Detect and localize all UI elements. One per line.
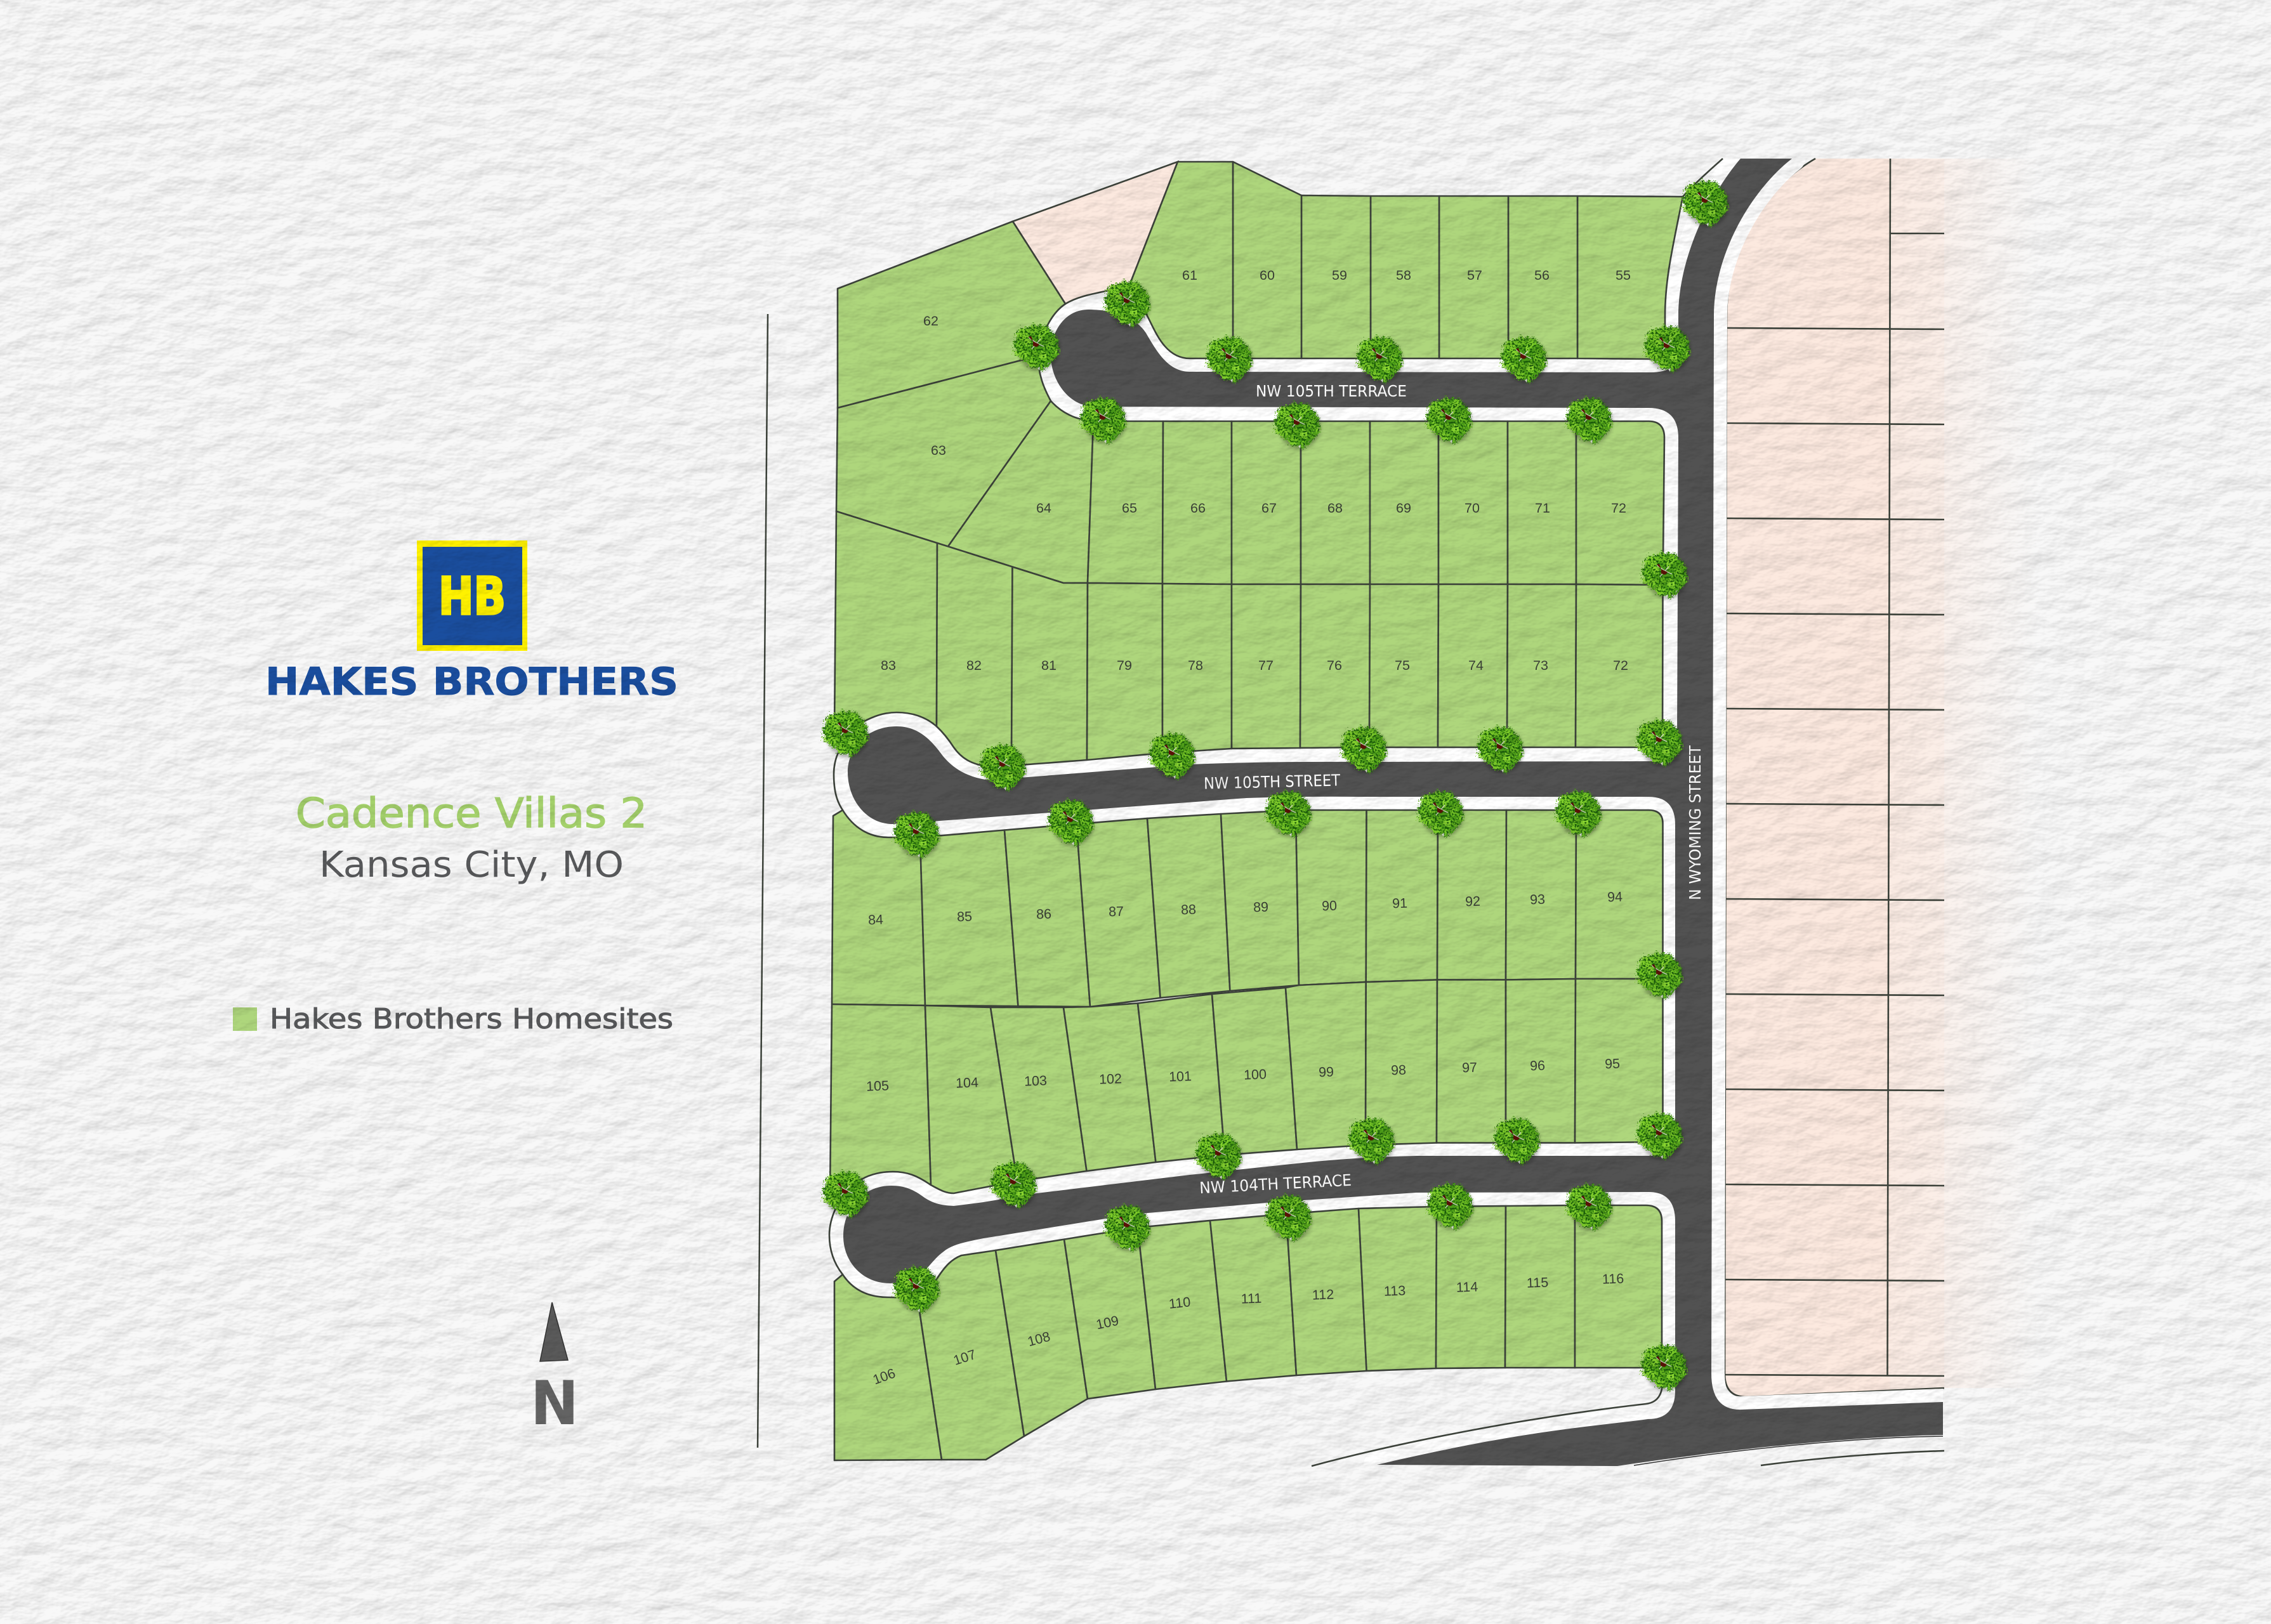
lot 70: 70 <box>1465 501 1480 516</box>
lot 100 <box>1212 988 1297 1155</box>
divider line between legend and site plan <box>758 314 768 1448</box>
lot 95 <box>1575 979 1662 1143</box>
icon: tree <box>1424 396 1472 444</box>
lot 103: 103 <box>1024 1073 1047 1089</box>
lot 66: 66 <box>1190 501 1206 516</box>
lot 104 <box>925 1005 1017 1193</box>
icon: tree <box>1635 951 1683 999</box>
lot 111: 111 <box>1241 1290 1262 1307</box>
community name: Cadence Villas 2 <box>296 790 647 837</box>
lot 74 <box>1438 584 1508 747</box>
lot 55: 55 <box>1616 268 1631 283</box>
icon: tree <box>892 1265 940 1313</box>
sidewalk edge lines <box>829 159 1944 1466</box>
lot 57: 57 <box>1467 268 1482 283</box>
lot 60 <box>1233 162 1301 358</box>
lot 110 <box>1138 1221 1227 1389</box>
icon: tree <box>1102 279 1150 327</box>
icon: tree <box>1102 1203 1150 1252</box>
panel: street trees <box>820 179 1728 1391</box>
lot 63: 63 <box>931 443 946 458</box>
icon: tree <box>1416 789 1464 837</box>
lot 70 <box>1438 421 1508 584</box>
icon: tree <box>1553 789 1602 837</box>
lot 84 <box>832 810 925 1005</box>
lot 93: 93 <box>1530 892 1545 907</box>
open space parcel <box>1013 162 1178 304</box>
lot 97 <box>1437 979 1506 1143</box>
lot 91 <box>1366 810 1438 982</box>
lot 113 <box>1359 1207 1437 1371</box>
lot 61: 61 <box>1182 268 1197 283</box>
lot 107 <box>918 1250 1024 1460</box>
panel: street labels <box>1199 382 1704 1197</box>
lot 86: 86 <box>1036 907 1051 922</box>
lot 115 <box>1505 1205 1575 1368</box>
lot 68: 68 <box>1327 501 1343 516</box>
lot 108 <box>996 1240 1088 1436</box>
icon: tree <box>1355 335 1403 383</box>
legend label: Hakes Brothers Homesites <box>270 1003 673 1035</box>
lot 114: 114 <box>1456 1279 1478 1295</box>
lot 76 <box>1300 584 1370 748</box>
lot 87 <box>1076 818 1161 1007</box>
lot 88 <box>1147 814 1230 998</box>
lot 95: 95 <box>1605 1056 1620 1071</box>
lot 58: 58 <box>1396 268 1411 283</box>
lot 106: 106 <box>871 1366 897 1387</box>
lot 104: 104 <box>956 1075 978 1091</box>
lot 66 <box>1162 421 1232 584</box>
panel: neighbouring land east of N Wyoming Street <box>1725 159 2040 1397</box>
lot 69 <box>1370 421 1438 584</box>
icon: tree <box>1640 551 1688 599</box>
lot 106 <box>834 1274 942 1460</box>
logo: HB square: HB <box>438 567 506 627</box>
lot 56 <box>1508 196 1577 358</box>
lot 105 <box>830 1004 931 1196</box>
lot 75 <box>1369 584 1438 747</box>
lot 99 <box>1286 982 1366 1149</box>
lot 96 <box>1506 979 1576 1143</box>
icon: tree <box>1680 179 1728 227</box>
icon: tree <box>1046 798 1094 846</box>
lot 100: 100 <box>1244 1066 1267 1083</box>
lot 82 <box>937 543 1013 767</box>
icon: tree <box>1642 324 1690 372</box>
icon: tree <box>1564 1182 1612 1231</box>
lot 55 <box>1577 196 1683 359</box>
north arrow <box>530 1302 579 1439</box>
icon: tree <box>892 810 940 858</box>
lot 78: 78 <box>1188 658 1203 673</box>
street label: NW 105th Street: NW 105TH STREET <box>1204 771 1341 793</box>
lot 77: 77 <box>1258 658 1274 673</box>
lot 74: 74 <box>1468 658 1484 673</box>
lot 64: 64 <box>1036 501 1051 516</box>
lot 69: 69 <box>1396 501 1411 516</box>
lot 91: 91 <box>1392 896 1407 911</box>
lot 72 south: 72 <box>1613 658 1628 673</box>
road network <box>843 159 1943 1466</box>
lot 111 <box>1210 1214 1296 1382</box>
lot 109: 109 <box>1095 1313 1120 1332</box>
lot 71: 71 <box>1535 501 1550 516</box>
icon: tree <box>1263 1193 1312 1241</box>
brand name: HAKES BROTHERS <box>265 660 678 704</box>
lot 94 <box>1576 810 1662 979</box>
legend swatch <box>233 1007 257 1031</box>
sidewalks <box>1723 165 1943 1398</box>
lot 64 <box>948 401 1093 583</box>
lot 79 <box>1087 583 1162 760</box>
lot 92 <box>1437 810 1506 979</box>
lot 72 north: 72 <box>1611 501 1626 516</box>
lot 99: 99 <box>1319 1064 1334 1080</box>
lot 98 <box>1366 979 1437 1145</box>
lot 61 <box>1130 162 1233 358</box>
lot 85 <box>920 830 1018 1006</box>
lot 67: 67 <box>1261 501 1277 516</box>
lot 86 <box>1004 824 1090 1007</box>
lot 57 <box>1439 196 1508 358</box>
icon: tree <box>1635 718 1683 766</box>
icon: tree <box>1564 396 1612 444</box>
lot 62 <box>838 221 1065 408</box>
icon: tree <box>1204 335 1253 383</box>
icon: tree <box>1272 401 1320 449</box>
lot 88: 88 <box>1181 902 1196 917</box>
lot 85: 85 <box>957 909 972 924</box>
lot 89 <box>1221 810 1299 991</box>
lot 76: 76 <box>1327 658 1342 673</box>
lot 103 <box>991 1007 1086 1181</box>
icon: tree <box>1339 725 1387 773</box>
lot 105: 105 <box>866 1078 889 1094</box>
lot 113: 113 <box>1383 1283 1406 1299</box>
lot 98: 98 <box>1391 1063 1406 1078</box>
lot 77 <box>1232 584 1301 749</box>
icon: tree <box>989 1160 1037 1208</box>
lot 62: 62 <box>923 313 938 329</box>
lot 73: 73 <box>1533 658 1548 673</box>
lot 90: 90 <box>1322 898 1337 914</box>
lot 60: 60 <box>1260 268 1275 283</box>
lot 72 north <box>1576 421 1664 585</box>
lot 116: 116 <box>1602 1271 1624 1287</box>
lot 82: 82 <box>966 658 982 673</box>
street label: NW 105th Terrace: NW 105TH TERRACE <box>1256 382 1407 400</box>
lot 115: 115 <box>1526 1274 1549 1291</box>
lot 84: 84 <box>868 912 883 927</box>
icon: tree <box>1011 323 1060 371</box>
lot 94: 94 <box>1607 889 1623 905</box>
lot 89: 89 <box>1253 900 1268 915</box>
lot 56: 56 <box>1534 268 1550 283</box>
lot 72 south <box>1576 584 1662 747</box>
lot 75: 75 <box>1395 658 1410 673</box>
lot 67 <box>1232 421 1301 584</box>
icon: tree <box>1263 789 1312 837</box>
lot 65: 65 <box>1122 501 1137 516</box>
icon: tree <box>1492 1116 1540 1165</box>
lot 92: 92 <box>1465 894 1480 909</box>
icon: tree <box>1194 1132 1242 1180</box>
icon: tree <box>1639 1343 1687 1391</box>
lot 59 <box>1301 195 1371 358</box>
icon: tree <box>1425 1182 1473 1230</box>
lot 58 <box>1371 196 1439 358</box>
lot 112 <box>1286 1208 1367 1375</box>
north arrow: N <box>530 1369 579 1439</box>
lot 81 <box>1011 567 1088 766</box>
street label: N Wyoming Street: N WYOMING STREET <box>1686 745 1704 900</box>
lot 114 <box>1436 1206 1506 1368</box>
lot 83 <box>834 511 937 730</box>
lot 78 <box>1162 584 1232 753</box>
icon: tree <box>1078 396 1126 444</box>
lot 68 <box>1301 421 1370 584</box>
lot 83: 83 <box>881 658 896 673</box>
lot 108: 108 <box>1026 1329 1052 1349</box>
icon: tree <box>978 743 1026 791</box>
icon: tree <box>1499 335 1547 383</box>
location: Kansas City, MO <box>319 844 624 886</box>
lot 79: 79 <box>1117 658 1132 673</box>
logo: HB square <box>417 540 527 651</box>
lot 101: 101 <box>1169 1068 1192 1085</box>
lot 59: 59 <box>1332 268 1347 283</box>
lot 112: 112 <box>1312 1287 1334 1303</box>
panel: homesites <box>830 162 1683 1460</box>
street label: NW 104th Terrace: NW 104TH TERRACE <box>1199 1171 1352 1197</box>
lot 101 <box>1138 994 1225 1162</box>
icon: tree <box>820 709 869 757</box>
lot 116 <box>1575 1205 1662 1368</box>
lot 102 <box>1063 1004 1155 1171</box>
lot 109 <box>1064 1228 1155 1399</box>
lot 107: 107 <box>952 1347 978 1368</box>
lot 71 <box>1508 421 1576 584</box>
icon: tree <box>1346 1116 1395 1165</box>
panel: brand and legend <box>233 540 678 1035</box>
icon: tree <box>1147 731 1195 780</box>
lot 73 <box>1507 584 1576 747</box>
lot 87: 87 <box>1109 904 1124 919</box>
icon: tree <box>1635 1111 1683 1160</box>
icon: tree <box>1475 725 1524 773</box>
lot 90 <box>1296 810 1367 985</box>
lot 97: 97 <box>1462 1060 1477 1075</box>
icon: tree <box>820 1170 869 1218</box>
thin line below south road <box>1634 1436 1943 1465</box>
lot 65 <box>1088 421 1163 584</box>
lot 110: 110 <box>1168 1294 1191 1312</box>
lot 102: 102 <box>1099 1071 1122 1087</box>
lot 81: 81 <box>1041 658 1057 673</box>
lot 93 <box>1506 810 1576 979</box>
lot 96: 96 <box>1530 1058 1545 1073</box>
lot 63 <box>836 356 1051 547</box>
